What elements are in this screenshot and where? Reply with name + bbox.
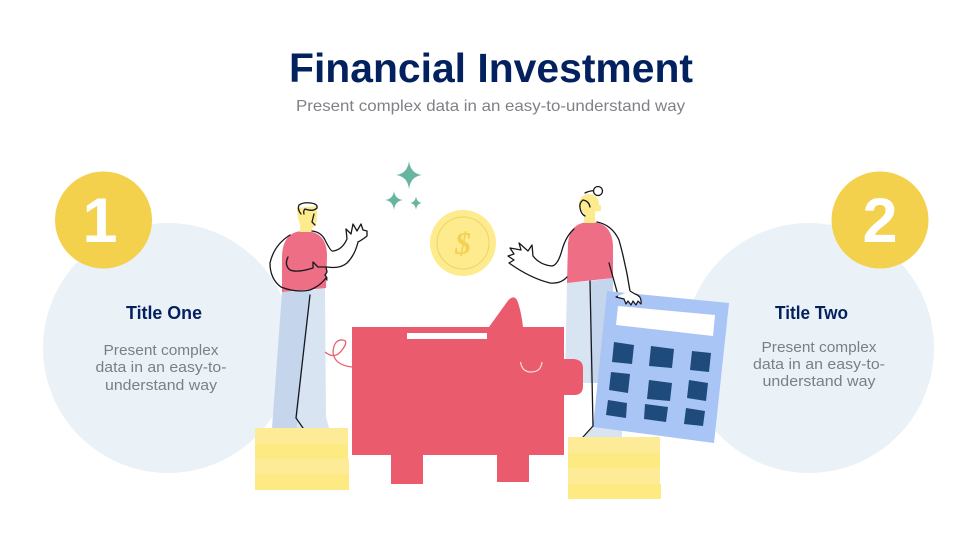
icon: dollar coin [430, 210, 496, 276]
pants [272, 288, 329, 428]
subtitle: Present complex data in an easy-to-understand way [296, 98, 685, 115]
illustration: man on coins [270, 203, 367, 428]
leg line [583, 281, 593, 437]
hand on calculator [616, 291, 641, 305]
head [579, 186, 602, 223]
description one: understand way [105, 377, 218, 394]
heading: title one: Title One [126, 303, 202, 323]
panel: item two [684, 172, 934, 473]
panel background circle [684, 223, 934, 473]
illustration: coin stack right [568, 437, 661, 499]
arms and hands outline [270, 224, 367, 291]
title: Financial Investment [289, 45, 693, 91]
pig body [352, 297, 583, 484]
illustration: coin stack left [255, 428, 349, 490]
arms and hands outline [508, 222, 630, 295]
number badge 1: 1 [82, 186, 118, 256]
shirt [567, 222, 613, 283]
icon: sparkles [385, 161, 422, 210]
number badge 2 [832, 172, 928, 268]
pig tail [325, 340, 352, 367]
pig eye [520, 362, 542, 372]
description two: understand way [762, 373, 876, 390]
description two [753, 339, 885, 390]
description two: Present complex [762, 339, 877, 356]
head [297, 203, 317, 232]
description one [96, 342, 226, 394]
woman's pants [565, 278, 622, 437]
description one: Present complex [104, 342, 219, 359]
illustration: woman with calculator [508, 186, 729, 443]
shirt [282, 231, 327, 292]
panel background circle [43, 223, 293, 473]
icon: dollar coin: $ [454, 225, 471, 261]
illustration: piggy bank [325, 297, 583, 484]
description one: data in an easy-to- [96, 359, 226, 376]
description two: data in an easy-to- [753, 356, 885, 373]
number badge 2: 2 [862, 186, 898, 256]
leg line [296, 295, 310, 428]
heading: title two: Title Two [775, 303, 848, 323]
panel: item one [43, 172, 293, 473]
calculator [593, 291, 729, 443]
number badge 1 [55, 172, 152, 268]
header [289, 45, 693, 115]
coin slot [407, 333, 487, 339]
